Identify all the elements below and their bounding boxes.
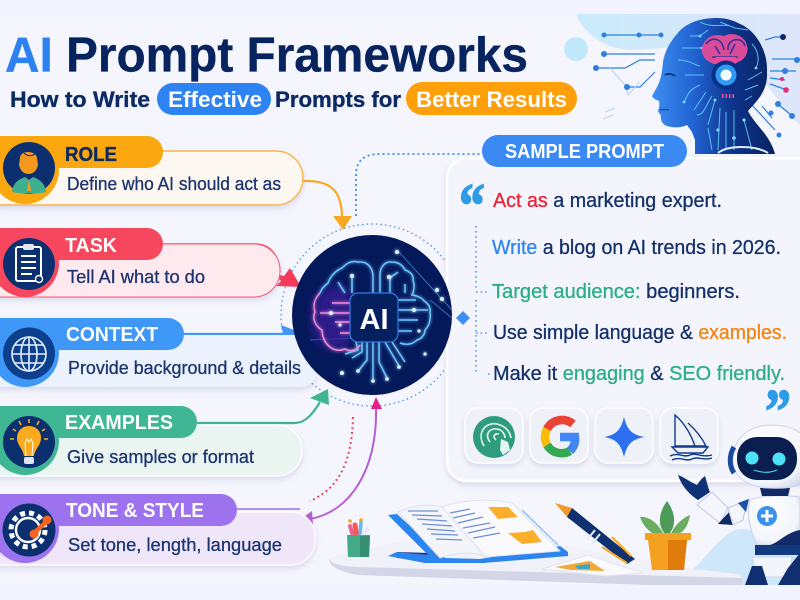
subtitle: Prompts for — [275, 87, 401, 112]
sample prompt heading: SAMPLE PROMPT — [505, 141, 664, 163]
opening quote: “ — [459, 172, 485, 240]
desk — [329, 541, 742, 585]
robot head — [733, 425, 800, 488]
prompt lines: Target audience: beginners. — [492, 281, 740, 303]
connector arrows — [163, 154, 482, 525]
illustration: pencil cup — [347, 518, 370, 557]
panel: examples: Give samples or format — [67, 447, 254, 467]
icon: blue sparkle — [604, 417, 645, 457]
central AI brain — [292, 235, 452, 395]
illustration: plant pot — [640, 501, 691, 570]
icon: spiral chat logo — [473, 416, 515, 458]
chip: AI — [360, 304, 388, 336]
illustration: open book — [388, 500, 568, 563]
panel: role: ROLE — [65, 144, 117, 166]
subtitle: Effective — [168, 87, 262, 112]
panel: role: Define who AI should act as — [67, 174, 281, 194]
panel: task: Tell AI what to do — [67, 267, 205, 287]
robot backdrop — [692, 529, 800, 585]
small diamond marker — [456, 311, 470, 325]
prompt lines: Write a blog on AI trends in 2026. — [492, 237, 781, 259]
panel: task: TASK — [65, 235, 118, 257]
prompt lines: Use simple language & examples. — [493, 322, 787, 344]
subtitle — [10, 82, 577, 115]
panel: tone and style — [0, 494, 315, 565]
illustration: robot — [678, 425, 800, 585]
title: AI Prompt Frameworks — [5, 28, 528, 82]
prompt lines: Make it engaging & SEO friendly. — [493, 363, 785, 385]
icon: globe — [3, 328, 55, 380]
panel: context: Provide background & details — [68, 358, 301, 378]
brain outline — [314, 262, 430, 380]
panel: tone and style: TONE & STYLE — [66, 500, 204, 522]
illustration: chart sheet — [542, 555, 643, 576]
dotted ring — [281, 224, 463, 406]
panel: role — [0, 136, 303, 205]
closing quote: ” — [765, 378, 791, 446]
logo tiles — [465, 408, 718, 463]
prompt lines — [476, 190, 787, 385]
icon: light bulb — [3, 416, 55, 468]
illustration: AI head — [564, 14, 800, 154]
robot torso — [748, 496, 800, 545]
sample prompt heading — [482, 135, 687, 167]
subtitle: How to Write — [10, 87, 150, 112]
robot arm — [697, 492, 728, 523]
icon: gear — [2, 504, 56, 556]
panel: tone and style: Set tone, length, language — [68, 535, 282, 555]
panel: context: CONTEXT — [66, 324, 158, 346]
panel: context — [0, 318, 318, 387]
subtitle: Better Results — [416, 87, 567, 112]
robot legs and hips — [752, 557, 792, 577]
panel: task — [0, 228, 280, 297]
panel: examples: EXAMPLES — [65, 412, 173, 434]
prompt lines: Act as a marketing expert. — [493, 190, 722, 212]
icon: multicolour G logo — [545, 420, 575, 453]
panel: examples — [0, 406, 302, 476]
icon: sailboat — [670, 415, 712, 460]
illustration: pen — [555, 503, 635, 564]
panel: sample prompt — [447, 135, 800, 481]
icon: clipboard — [3, 238, 55, 290]
chip — [350, 293, 398, 342]
icon: person — [3, 142, 55, 194]
